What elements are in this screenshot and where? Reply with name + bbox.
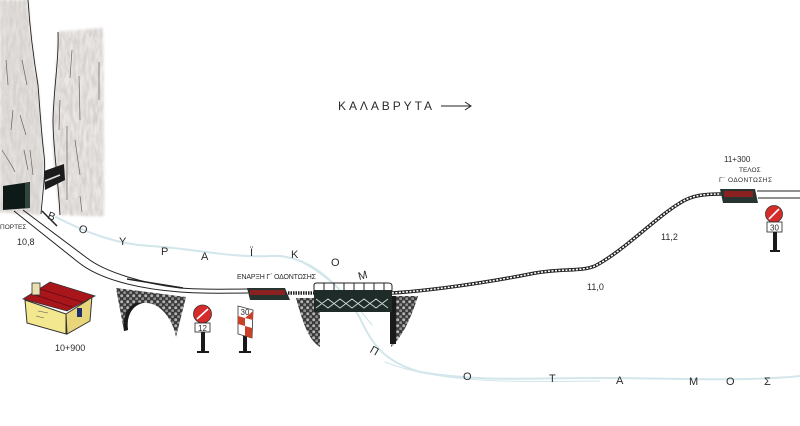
label: start of rack section: ΕΝΑΡΞΗ Γ΄ ΟΔΟΝΤΩΣΗΣ [237,274,317,281]
label: end of rack section: ΤΕΛΟΣ [739,167,761,174]
label: 10+900: 10+900 [55,343,85,353]
heading: Kalavryta with arrow: ΚΑΛΑΒΡΥΤΑ [338,99,432,113]
railway track: upper section [757,191,800,198]
railway track: lower section [14,210,248,293]
sign: 30 speed limit [766,206,782,252]
river name: Vouraikos Potamos: Α [201,251,209,263]
label: km 11,0: 11,0 [587,282,604,292]
river name: Vouraikos Potamos: Π [368,344,381,358]
cliff: right rock face [53,28,104,216]
river name: Vouraikos Potamos [46,210,771,388]
tunnel: lower portal (Portes) [3,182,30,210]
marker: rack section end [720,189,758,203]
marker: rack section start [247,288,290,300]
river: Vouraikos [56,217,800,382]
river name: Vouraikos Potamos: Σ [764,376,771,388]
label: km 11,2: 11,2 [661,232,678,242]
river name: Vouraikos Potamos: Υ [119,236,127,248]
house: station building [23,282,95,334]
label: 11+300: 11+300 [724,155,751,164]
river name: Vouraikos Potamos: Ο [331,257,340,269]
sign: 30 checkered board [238,306,253,353]
river name: Vouraikos Potamos: Μ [689,376,698,388]
river name: Vouraikos Potamos: Ο [77,223,89,237]
label: Portes: ΠΟΡΤΕΣ [0,224,26,231]
label: end of rack section line 2: Γ΄ ΟΔΟΝΤΩΣΗΣ [719,177,772,184]
bridge: steel truss deck [314,283,392,312]
sign: 12 speed limit: 12 [198,324,207,333]
river name: Vouraikos Potamos: Ο [726,376,735,388]
bridge piers [296,296,418,347]
river name: Vouraikos Potamos: Ο [463,371,472,383]
river name: Vouraikos Potamos: Ρ [161,246,168,258]
railway track: hatched rack from bridge to start [288,291,316,295]
river name: Vouraikos Potamos: Β [46,210,57,224]
sign: 30 speed limit: 30 [770,224,779,232]
cliff: left rock face [0,0,45,215]
river name: Vouraikos Potamos: Τ [549,373,556,385]
river name: Vouraikos Potamos: Μ [357,269,369,283]
river name: Vouraikos Potamos: Κ [291,249,299,261]
sign: 12 speed limit [194,305,212,353]
label: km 10,8: 10,8 [17,237,35,247]
tunnel: upper portal [44,164,65,190]
railway track: rack climb [392,194,722,293]
viaduct: stone arch bridge [116,288,186,337]
river name: Vouraikos Potamos: Ϊ [250,247,254,259]
river name: Vouraikos Potamos: Α [616,375,624,387]
sign: 30 checkered board: 30 [241,308,250,317]
